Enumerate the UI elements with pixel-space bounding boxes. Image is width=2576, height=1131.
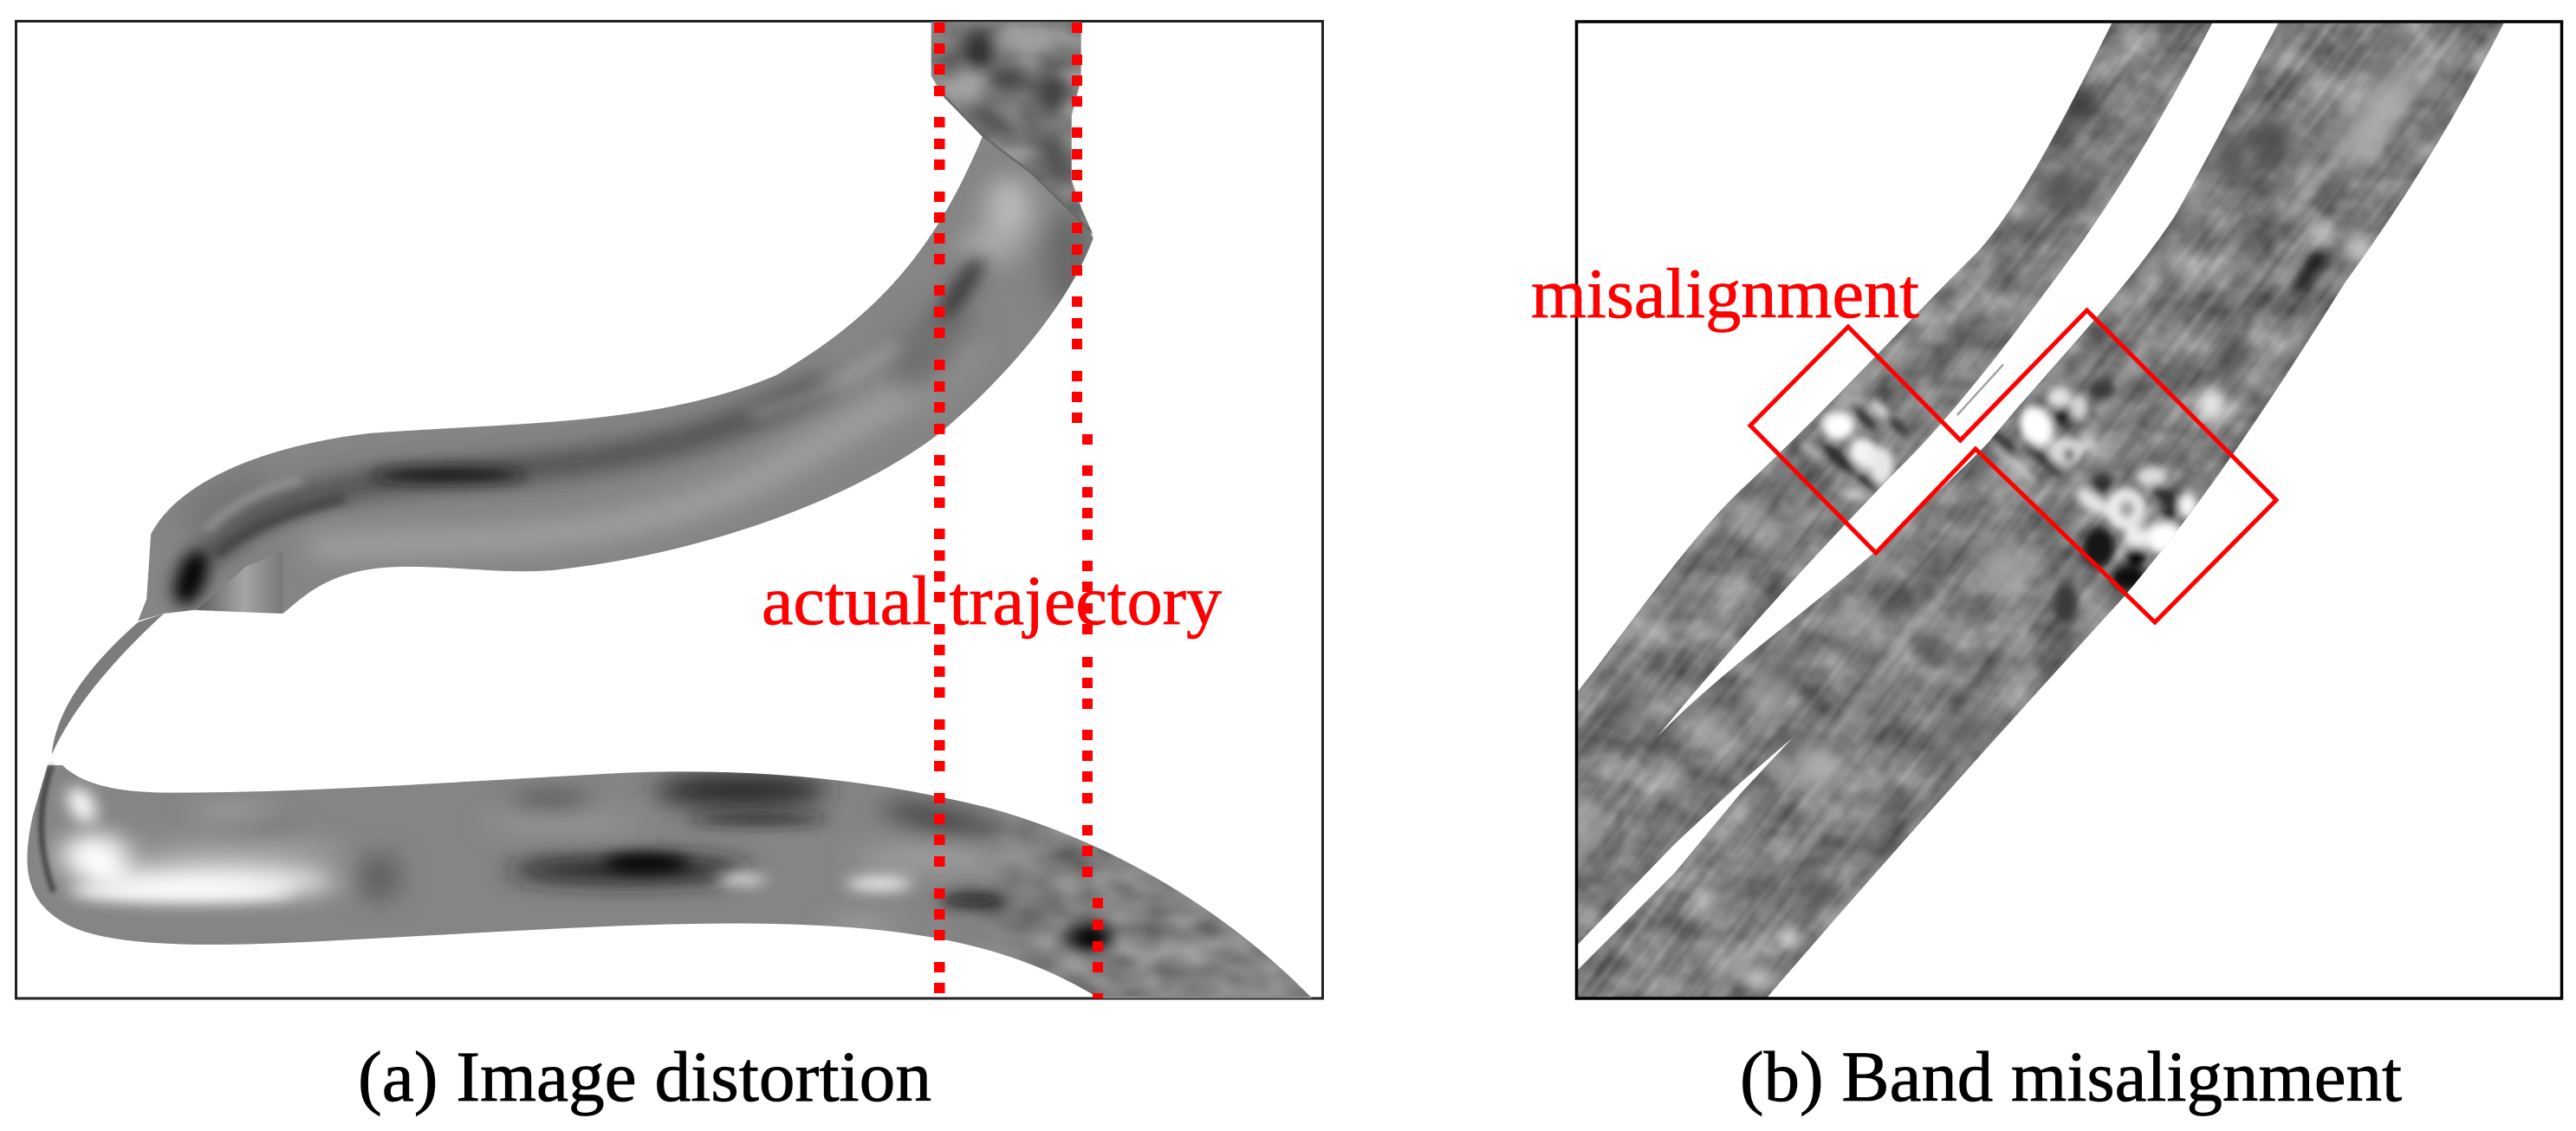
mottled end of bottom ribbon (996, 818, 1309, 997)
panel frame (b) (1577, 22, 2561, 998)
red dotted line: left trajectory (934, 23, 944, 993)
panel frame (a) (16, 21, 1322, 998)
caption (b): (b) Band misalignment (1740, 1037, 2402, 1116)
thin slit (1957, 365, 2003, 415)
warped image strip (a) (17, 18, 1336, 1004)
white gap between bands (1658, 23, 2279, 737)
panel: image distortion (16, 18, 1336, 1004)
middle ribbon (129, 130, 1104, 628)
stitched image bands (b) (1566, 18, 2523, 1004)
solid block notch (197, 551, 282, 614)
annotation: misalignment: misalignment (1531, 254, 1919, 333)
lower white gap (1577, 738, 1793, 971)
misaligned right region (1986, 380, 2196, 623)
bottom ribbon (17, 765, 1336, 1004)
misalignment outline (1750, 310, 2276, 622)
panel: band misalignment (1531, 18, 2561, 1004)
annotation: actual trajectory: actual trajectory (762, 563, 1222, 640)
dark fold on the left edge (42, 765, 54, 892)
caption (a): (a) Image distortion (358, 1037, 931, 1116)
thin twisted strip (52, 614, 164, 754)
upper-right dark defect (2296, 249, 2323, 292)
misaligned left region (1798, 397, 1913, 500)
red dotted line: right trajectory (1072, 23, 1103, 998)
upper strip (931, 22, 1093, 235)
